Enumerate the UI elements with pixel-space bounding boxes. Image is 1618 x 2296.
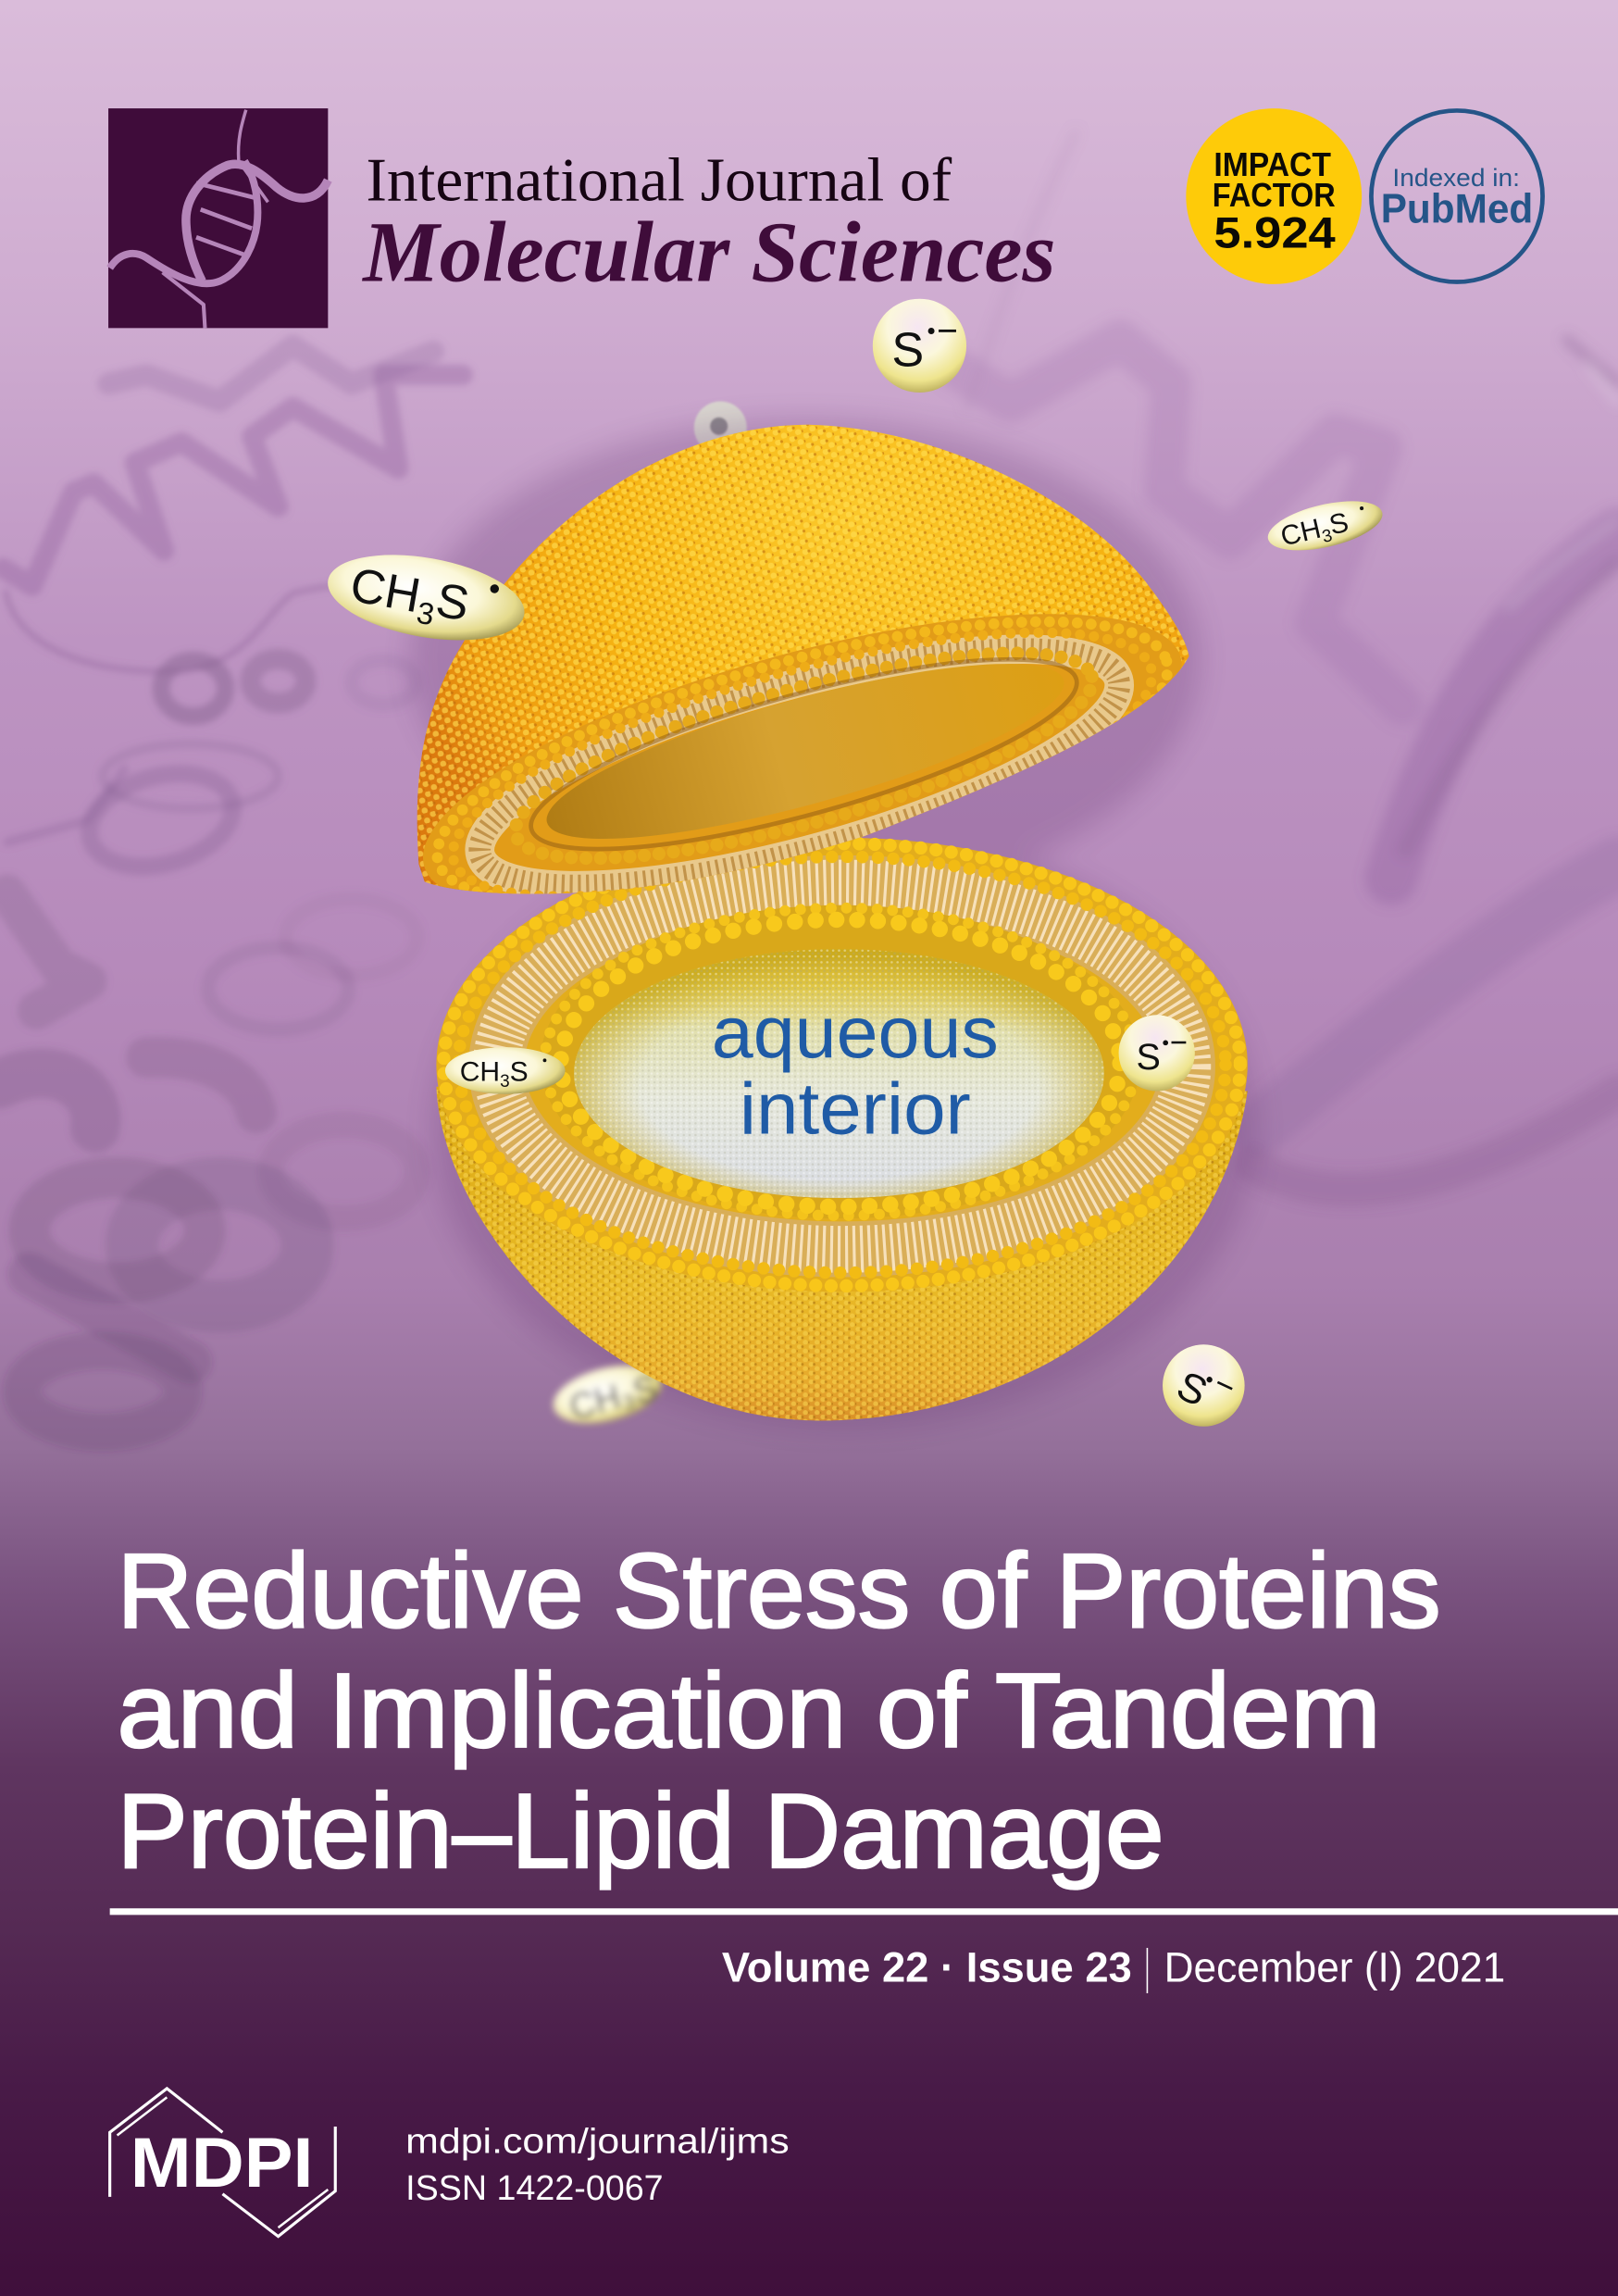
- aqueous interior: [574, 949, 1104, 1198]
- MDPI logo: [110, 2089, 335, 2237]
- badge: impact factor: FACTOR: [1213, 176, 1336, 214]
- soft shadow behind liposome: [410, 418, 1258, 1428]
- molecule: CH3S oval upper right: [1263, 492, 1387, 559]
- molecule: S radical lower right: [1163, 1344, 1245, 1427]
- molecule: S radical in bilayer: [1119, 1015, 1195, 1092]
- journal URL and ISSN: [405, 2122, 790, 2208]
- badge: indexed in PubMed: PubMed: [1381, 186, 1533, 231]
- background: protein ribbon, upper and right side: [952, 131, 1618, 1190]
- badge: impact factor: [1186, 108, 1362, 284]
- label: aqueous interior: aqueous: [712, 991, 999, 1073]
- dome surface: [417, 425, 1189, 893]
- molecule: CH3S large oval: 3: [414, 596, 437, 632]
- bilayer cross-section disc: [436, 838, 1248, 1292]
- molecule: S radical top: S: [891, 323, 924, 377]
- journal logo: DNA square: [108, 108, 328, 328]
- molecule: blurred CH3S behind lower hemisphere: [547, 1355, 668, 1433]
- volume, issue and date: Volume 22 · Issue 23: [722, 1942, 1132, 1990]
- molecule: CH3S oval upper right: 3: [1320, 526, 1334, 547]
- icon: hexagon outline: [110, 2089, 335, 2237]
- article title: and Implication of Tandem: [118, 1653, 1381, 1770]
- journal title: Molecular Sciences: [361, 206, 1056, 301]
- molecule: CH3S oval upper right: CH: [1277, 514, 1324, 553]
- molecule: CH3S large oval: CH: [346, 558, 425, 623]
- hemisphere bowl: [436, 1087, 1248, 1420]
- background: protein ribbon, left side: [0, 345, 513, 1432]
- molecule: CH3S oval in bilayer: S: [510, 1056, 529, 1087]
- journal URL and ISSN: ISSN 1422-0067: [405, 2169, 664, 2208]
- molecule: CH3S oval upper right: S: [1326, 507, 1351, 541]
- molecule: S radical top: [873, 299, 966, 393]
- badge: indexed in PubMed: [1371, 110, 1543, 282]
- label: aqueous interior: interior: [740, 1067, 971, 1149]
- badge: indexed in PubMed: Indexed in:: [1392, 164, 1520, 192]
- molecule: S radical lower right: S: [1170, 1363, 1214, 1416]
- molecule: CH3S oval in bilayer: [445, 1047, 566, 1094]
- molecule: CH3S oval in bilayer: CH: [460, 1056, 500, 1087]
- icon: DNA helix: [110, 110, 328, 328]
- article title: [118, 1533, 1441, 1890]
- molecule: CH3S oval in bilayer: 3: [500, 1072, 510, 1092]
- molecule: blurred CH3S behind lower hemisphere: CH₃S: [566, 1368, 661, 1428]
- title rule: [110, 1908, 1618, 1915]
- article title: Protein–Lipid Damage: [118, 1773, 1164, 1890]
- lower liposome hemisphere: [436, 838, 1248, 1420]
- molecule: CH3S large oval: [321, 542, 531, 654]
- journal URL and ISSN: mdpi.com/journal/ijms: [405, 2122, 790, 2161]
- molecule: CH3S large oval: S: [432, 573, 473, 631]
- molecule: S radical in bilayer: S: [1137, 1037, 1161, 1078]
- MDPI logo: MDPI: [131, 2124, 314, 2202]
- label: aqueous interior: [712, 991, 999, 1149]
- dome cut rim: [423, 614, 1182, 894]
- upper liposome hemisphere (dome): [417, 424, 1189, 894]
- volume, issue and date: December (I) 2021: [1164, 1942, 1505, 1990]
- badge: impact factor: 5.924: [1214, 208, 1336, 257]
- volume, issue and date: [722, 1942, 1505, 1993]
- article title: Reductive Stress of Proteins: [118, 1533, 1441, 1651]
- journal title: International Journal of: [366, 147, 952, 215]
- dome inner opening: [533, 630, 1077, 873]
- small grey molecule behind the dome: [694, 401, 747, 454]
- badge: impact factor: IMPACT: [1214, 145, 1331, 183]
- journal title: [361, 147, 1056, 301]
